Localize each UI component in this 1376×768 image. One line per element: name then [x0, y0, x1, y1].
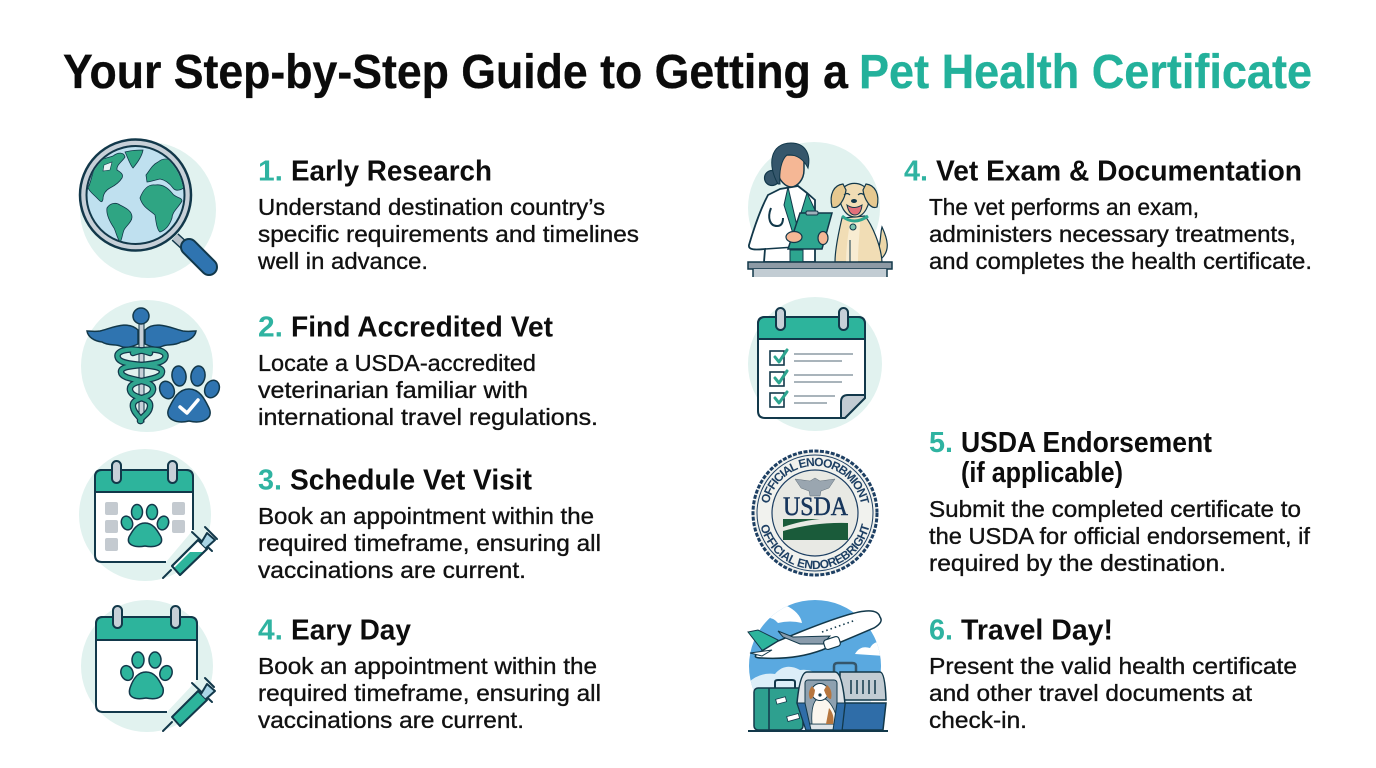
- title: Pet Health Certificate: [859, 46, 1312, 99]
- step 4 text: early day: 4.: [258, 614, 283, 646]
- step 3 text: Schedule Vet Visit: [290, 464, 532, 496]
- step 3 text: 3.: [258, 464, 282, 496]
- step 5 text: required by the destination.: [929, 550, 1226, 576]
- step 2 text: international travel regulations.: [258, 404, 598, 430]
- step 6 text: 6.: [929, 614, 953, 646]
- step 2 text: 2.: [258, 312, 283, 344]
- step 4 text: vet exam: [904, 156, 1312, 274]
- step 3 text: vaccinations are current.: [258, 557, 526, 583]
- icon: USDA official endorsement seal: OFFICIAL ENDOREBRIGHT: [761, 523, 869, 570]
- step 1 text: Early Research: [291, 156, 492, 188]
- step 5 text: [929, 427, 1311, 576]
- icon: veterinarian with dog on exam table: [748, 142, 892, 277]
- step 1 text: Understand destination country’s: [258, 194, 605, 220]
- step 4 text: vet exam: 4.: [904, 156, 928, 188]
- step 3 text: [258, 464, 601, 583]
- step 2 text: Locate a USDA-accredited: [258, 350, 536, 376]
- icon: USDA official endorsement seal: [752, 450, 878, 576]
- icon: calendar with paw and syringe: [79, 449, 217, 581]
- step 3 text: Book an appointment within the: [258, 503, 594, 529]
- icon: USDA official endorsement seal: USDA: [783, 492, 848, 521]
- icon: calendar with large paw and syringe: [81, 600, 215, 732]
- step 2 text: [258, 312, 598, 430]
- icon: caduceus and paw with check: [81, 300, 222, 432]
- step 5 text: 5.: [929, 427, 953, 459]
- title: Your Step-by-Step Guide to Getting a: [63, 46, 848, 99]
- step 4 text: vet exam: The vet performs an exam,: [929, 194, 1199, 220]
- step 4 text: early day: [258, 614, 601, 733]
- icon: globe under magnifying glass: [80, 140, 216, 278]
- step 5 text: (if applicable): [961, 457, 1123, 489]
- icon: USDA official endorsement seal: OFFICIAL ENOORBMIONT: [762, 458, 870, 503]
- step 1 text: 1.: [258, 156, 283, 188]
- step 4 text: vet exam: Vet Exam & Documentation: [936, 156, 1302, 188]
- step 4 text: early day: Eary Day: [291, 614, 411, 646]
- step 5 text: Submit the completed certificate to: [929, 496, 1301, 522]
- step 6 text: Travel Day!: [961, 614, 1113, 646]
- step 3 text: required timeframe, ensuring all: [258, 530, 601, 556]
- step 1 text: well in advance.: [257, 248, 428, 274]
- step 6 text: and other travel documents at: [929, 680, 1253, 706]
- step 4 text: vet exam: administers necessary treatments,: [929, 221, 1296, 247]
- step 4 text: early day: required timeframe, ensuring all: [258, 680, 601, 706]
- step 1 text: [257, 156, 639, 274]
- step 2 text: Find Accredited Vet: [291, 312, 553, 344]
- icon: airplane, suitcase and pet carrier: [745, 600, 888, 732]
- step 5 text: the USDA for official endorsement, if: [929, 523, 1311, 549]
- step 6 text: [929, 614, 1297, 733]
- step 4 text: early day: Book an appointment within the: [258, 653, 597, 679]
- step 1 text: specific requirements and timelines: [258, 221, 639, 247]
- step 5 text: USDA Endorsement: [961, 427, 1212, 459]
- step 6 text: check-in.: [929, 707, 1027, 733]
- step 2 text: veterinarian familiar with: [258, 377, 528, 403]
- icon: checklist calendar: [748, 297, 882, 431]
- step 4 text: early day: vaccinations are current.: [258, 707, 524, 733]
- step 4 text: vet exam: and completes the health certificate.: [929, 248, 1312, 274]
- step 6 text: Present the valid health certificate: [929, 653, 1297, 679]
- title: [63, 46, 1312, 99]
